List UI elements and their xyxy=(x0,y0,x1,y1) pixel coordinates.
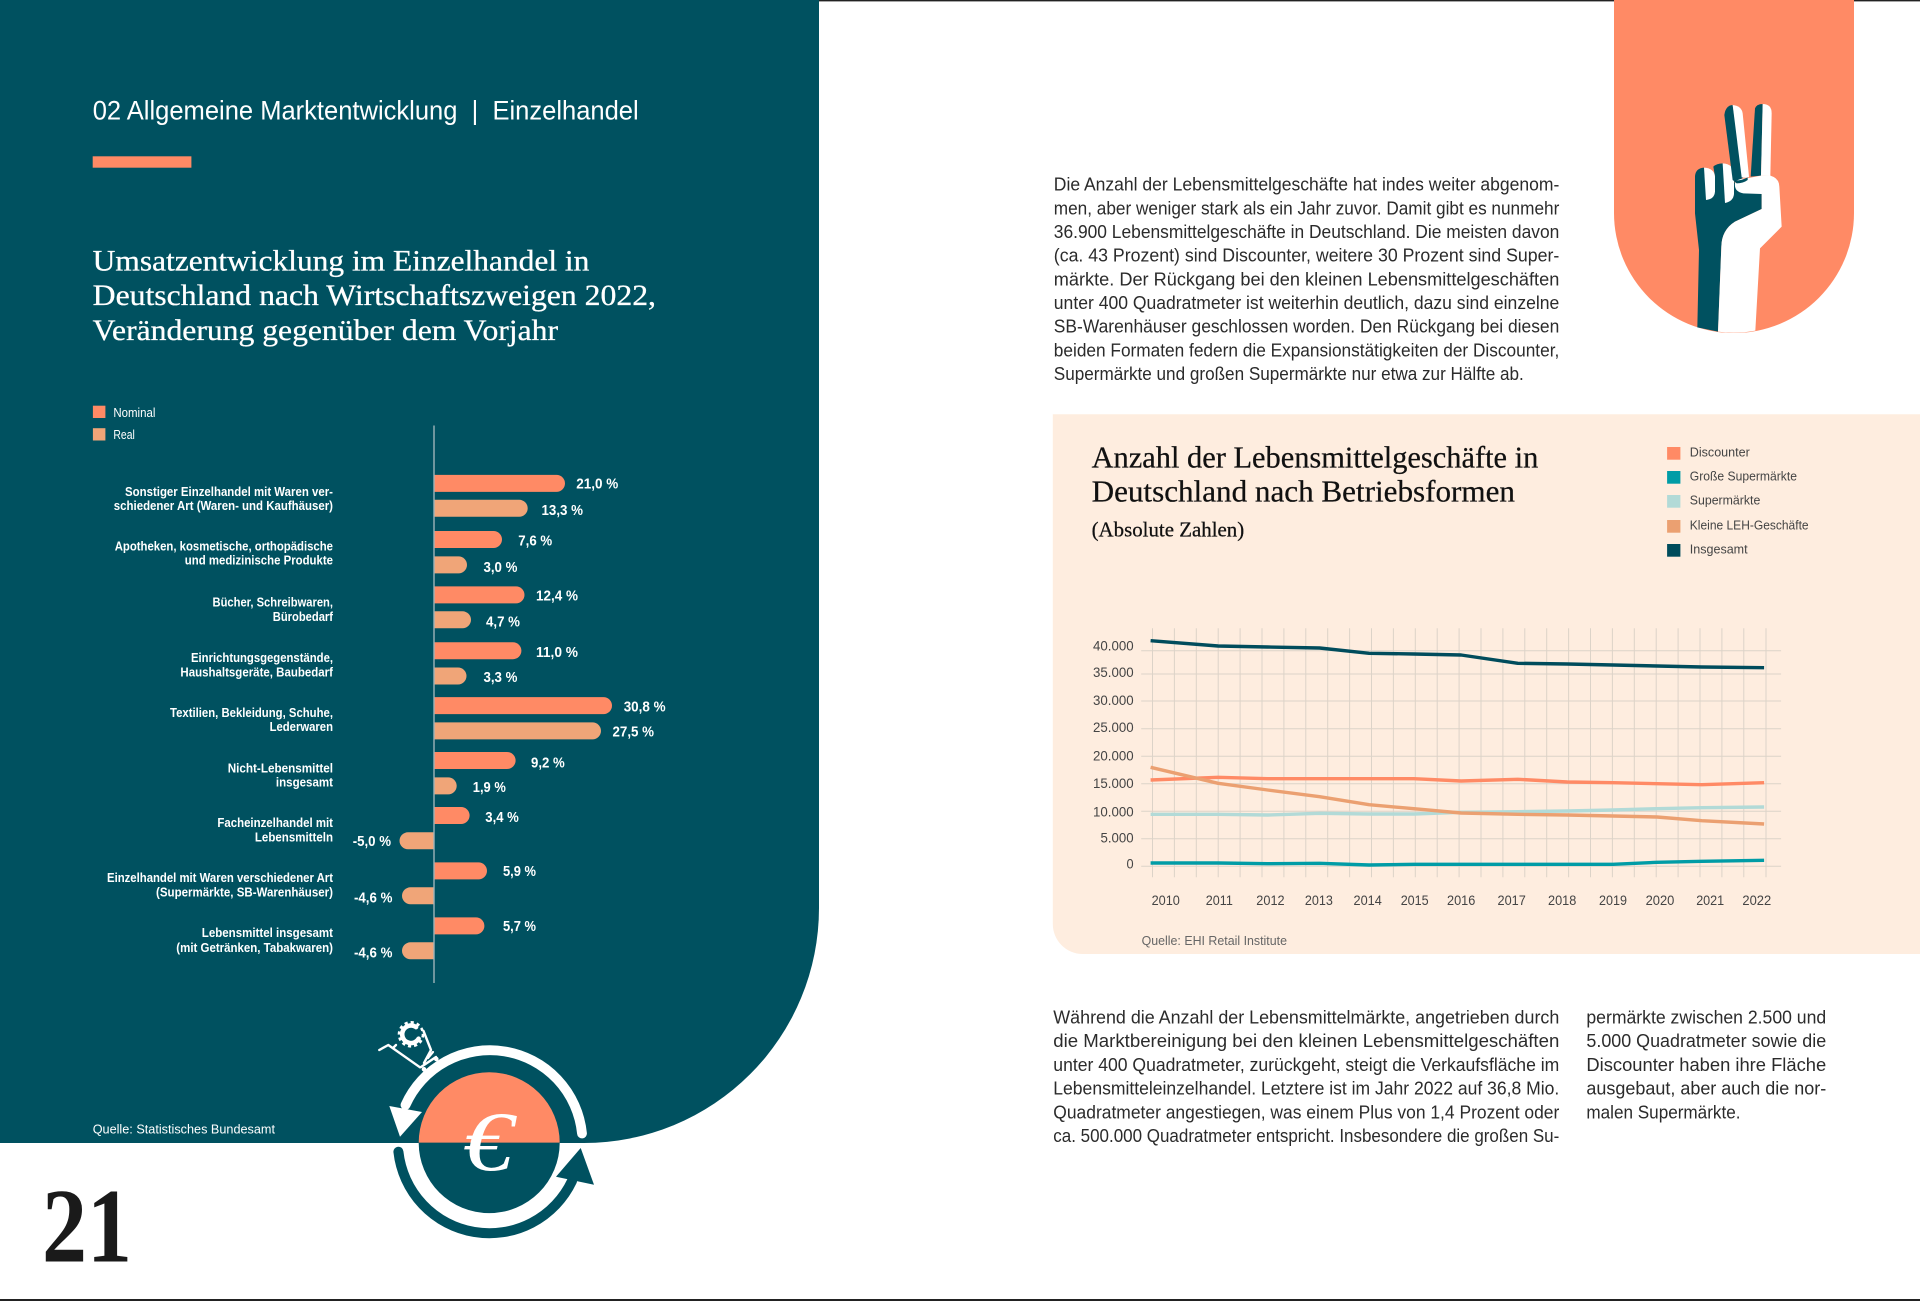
y axis labels: 40.000 xyxy=(1093,639,1134,654)
category labels: Lederwaren xyxy=(270,720,333,734)
x axis labels: 2011 xyxy=(1206,893,1233,908)
source: left chart: Quelle: Statistisches Bundesamt xyxy=(93,1121,275,1136)
icon: coral upper half circle xyxy=(419,1072,560,1143)
x axis labels: 2012 xyxy=(1256,893,1285,908)
legend: store formats xyxy=(1667,446,1809,557)
line: Discounter xyxy=(1151,777,1764,785)
line chart: number of grocery stores xyxy=(1093,628,1781,908)
text block: upper right paragraph: Supermärkte und großen Supermärkte nur etwa zur Hälfte ab. xyxy=(1054,364,1524,384)
heading: line chart title: (Absolute Zahlen) xyxy=(1092,518,1244,542)
axis line xyxy=(433,426,435,983)
value labels: 27,5 % xyxy=(612,725,654,741)
text block: upper right paragraph: beiden Formaten federn die Expansionstätigkeiten der Discounter, xyxy=(1054,340,1559,360)
value labels: 7,6 % xyxy=(518,534,552,550)
legend: store formats: Insgesamt xyxy=(1690,542,1748,556)
category labels: Haushaltsgeräte, Baubedarf xyxy=(180,666,334,680)
category labels xyxy=(107,485,334,955)
value labels: 30,8 % xyxy=(624,699,666,715)
text block: lower paragraph column one: ca. 500.000 Quadratmeter entspricht. Insbesondere die großen Su- xyxy=(1053,1126,1559,1146)
x axis labels: 2015 xyxy=(1401,893,1429,908)
text block: upper right paragraph xyxy=(1054,175,1559,384)
heading: left chart title: Veränderung gegenüber dem Vorjahr xyxy=(93,314,558,347)
text block: lower paragraph column one: die Marktbereinigung bei den kleinen Lebensmittelgeschäften xyxy=(1053,1031,1559,1051)
text block: lower paragraph column two: ausgebaut, aber auch die nor- xyxy=(1586,1079,1826,1099)
value labels: 1,9 % xyxy=(473,780,506,796)
heading: left chart title: Umsatzentwicklung im Einzelhandel in xyxy=(93,244,589,278)
icon: teal lower arrow xyxy=(398,1148,594,1233)
category labels: Textilien, Bekleidung, Schuhe, xyxy=(170,706,333,720)
category labels: Lebensmittel insgesamt xyxy=(202,926,334,940)
y axis labels: 35.000 xyxy=(1093,665,1134,680)
value labels: 5,9 % xyxy=(503,864,536,880)
value labels: 13,3 % xyxy=(542,503,583,519)
text block: lower paragraph column two: malen Supermärkte. xyxy=(1586,1102,1740,1122)
line: Große Supermärkte xyxy=(1151,860,1764,865)
text block: lower paragraph column one: unter 400 Quadratmeter, zurückgeht, steigt die Verkaufsfläche im xyxy=(1053,1055,1559,1075)
y axis labels: 30.000 xyxy=(1093,693,1134,708)
legend: nominal and real xyxy=(93,406,155,442)
x axis labels: 2019 xyxy=(1599,893,1627,908)
icon: white upper arrow xyxy=(389,1050,582,1137)
text block: upper right paragraph: men, aber weniger stark als ein Jahr zuvor. Damit gibt es nunmehr xyxy=(1054,198,1559,218)
category labels: und medizinische Produkte xyxy=(185,554,333,568)
icon: euro sign: € xyxy=(463,1095,517,1189)
heading: left chart title xyxy=(93,244,656,347)
value labels: 21,0 % xyxy=(576,477,618,493)
text block: upper right paragraph: (ca. 43 Prozent) sind Discounter, weitere 30 Prozent sind Super- xyxy=(1054,246,1559,266)
text block: upper right paragraph: 36.900 Lebensmittelgeschäfte in Deutschland. Die meisten davon xyxy=(1054,222,1559,242)
icon: euro money cycle xyxy=(379,1022,594,1233)
panel: coral victory hand banner xyxy=(1614,0,1854,333)
category labels: Apotheken, kosmetische, orthopädische xyxy=(115,539,333,553)
icon: victory hand xyxy=(1695,104,1782,333)
legend: nominal and real: Nominal xyxy=(113,406,155,420)
x axis labels: 2010 xyxy=(1152,893,1180,908)
text block: upper right paragraph: unter 400 Quadratmeter ist weiterhin deutlich, dazu sind einzelne xyxy=(1054,293,1559,313)
value labels: -5,0 % xyxy=(353,834,391,850)
text block: upper right paragraph: Die Anzahl der Lebensmittelgeschäfte hat indes weiter abgenom- xyxy=(1054,175,1559,195)
text block: lower paragraph column two xyxy=(1586,1007,1826,1122)
heading: line chart title: Deutschland nach Betriebsformen xyxy=(1092,474,1515,509)
category labels: Bürobedarf xyxy=(273,610,334,624)
text block: lower paragraph column two: 5.000 Quadratmeter sowie die xyxy=(1586,1031,1826,1051)
value labels: 12,4 % xyxy=(536,589,578,605)
value labels xyxy=(353,477,666,961)
value labels: -4,6 % xyxy=(354,945,392,961)
y axis labels: 10.000 xyxy=(1093,804,1134,819)
heading: left chart title: Deutschland nach Wirtschaftszweigen 2022, xyxy=(93,279,656,312)
x axis labels: 2014 xyxy=(1354,893,1382,908)
nominal bars xyxy=(434,475,612,934)
x axis labels: 2021 xyxy=(1696,893,1724,908)
panel: cream line chart card xyxy=(1053,414,1920,954)
value labels: 3,4 % xyxy=(485,810,519,826)
x axis labels: 2020 xyxy=(1646,893,1674,908)
x axis labels xyxy=(1152,893,1771,908)
text block: upper right paragraph: märkte. Der Rückgang bei den kleinen Lebensmittelgeschäften xyxy=(1054,269,1559,289)
value labels: -4,6 % xyxy=(354,890,392,906)
y axis labels: 25.000 xyxy=(1093,720,1134,735)
value labels: 5,7 % xyxy=(503,919,536,935)
category labels: Sonstiger Einzelhandel mit Waren ver- xyxy=(125,485,333,499)
heading: section header: 02 Allgemeine Marktentwicklung | Einzelhandel xyxy=(93,95,639,125)
legend: nominal and real: Real xyxy=(113,428,135,442)
x axis labels: 2017 xyxy=(1498,893,1526,908)
accent bar xyxy=(93,156,191,168)
value labels: 3,3 % xyxy=(484,670,517,686)
bar chart: retail sales change by sector xyxy=(107,426,666,983)
icon: shopping cart with gear xyxy=(379,1022,438,1071)
y axis labels xyxy=(1093,639,1134,872)
text block: lower paragraph column two: permärkte zwischen 2.500 und xyxy=(1586,1007,1826,1027)
heading: line chart title xyxy=(1092,439,1539,542)
legend: store formats: Große Supermärkte xyxy=(1690,470,1797,484)
value labels: 4,7 % xyxy=(486,614,520,630)
category labels: Nicht-Lebensmittel xyxy=(228,761,333,775)
x axis labels: 2022 xyxy=(1742,893,1771,908)
legend: store formats: Kleine LEH-Geschäfte xyxy=(1690,518,1809,532)
category labels: Bücher, Schreibwaren, xyxy=(212,596,333,610)
category labels: Lebensmitteln xyxy=(255,830,333,844)
real bars xyxy=(400,500,601,959)
category labels: (mit Getränken, Tabakwaren) xyxy=(176,941,333,955)
legend: store formats: Discounter xyxy=(1690,446,1750,460)
category labels: Einrichtungsgegenstände, xyxy=(191,651,333,665)
y axis labels: 0 xyxy=(1126,857,1134,872)
text block: lower paragraph column one: Lebensmitteleinzelhandel. Letztere ist im Jahr 2022 auf 36,8 Mio. xyxy=(1053,1079,1559,1099)
value labels: 9,2 % xyxy=(531,756,565,772)
x axis labels: 2018 xyxy=(1548,893,1576,908)
category labels: (Supermärkte, SB-Warenhäuser) xyxy=(156,885,333,899)
y axis labels: 20.000 xyxy=(1093,749,1134,764)
text block: lower paragraph column one: Während die Anzahl der Lebensmittelmärkte, angetrieben durch xyxy=(1053,1007,1559,1027)
value labels: 3,0 % xyxy=(484,560,517,576)
icon: teal lower half circle xyxy=(419,1143,560,1213)
x axis labels: 2013 xyxy=(1305,893,1333,908)
category labels: Facheinzelhandel mit xyxy=(217,816,334,830)
text block: lower paragraph column one xyxy=(1053,1007,1559,1146)
text block: lower paragraph column two: Discounter haben ihre Fläche xyxy=(1586,1055,1826,1075)
y axis labels: 15.000 xyxy=(1093,776,1134,791)
line: Insgesamt xyxy=(1151,641,1764,668)
text block: lower paragraph column one: Quadratmeter angestiegen, was einem Plus von 1,4 Prozent oder xyxy=(1053,1102,1559,1122)
text block: upper right paragraph: SB-Warenhäuser geschlossen worden. Den Rückgang bei diesen xyxy=(1054,317,1559,337)
x axis labels: 2016 xyxy=(1447,893,1475,908)
panel: left teal background xyxy=(0,0,819,1143)
line: Supermärkte xyxy=(1151,807,1764,815)
category labels: schiedener Art (Waren- und Kaufhäuser) xyxy=(114,499,333,513)
y axis labels: 5.000 xyxy=(1100,831,1134,846)
line: Kleine LEH-Geschäfte xyxy=(1151,767,1764,824)
category labels: insgesamt xyxy=(276,776,334,790)
source: line chart: Quelle: EHI Retail Institute xyxy=(1142,933,1287,948)
page number: 21 xyxy=(42,1168,132,1285)
heading: line chart title: Anzahl der Lebensmittelgeschäfte in xyxy=(1092,439,1539,474)
category labels: Einzelhandel mit Waren verschiedener Art xyxy=(107,871,334,885)
legend: store formats: Supermärkte xyxy=(1690,494,1760,508)
value labels: 11,0 % xyxy=(536,645,578,661)
